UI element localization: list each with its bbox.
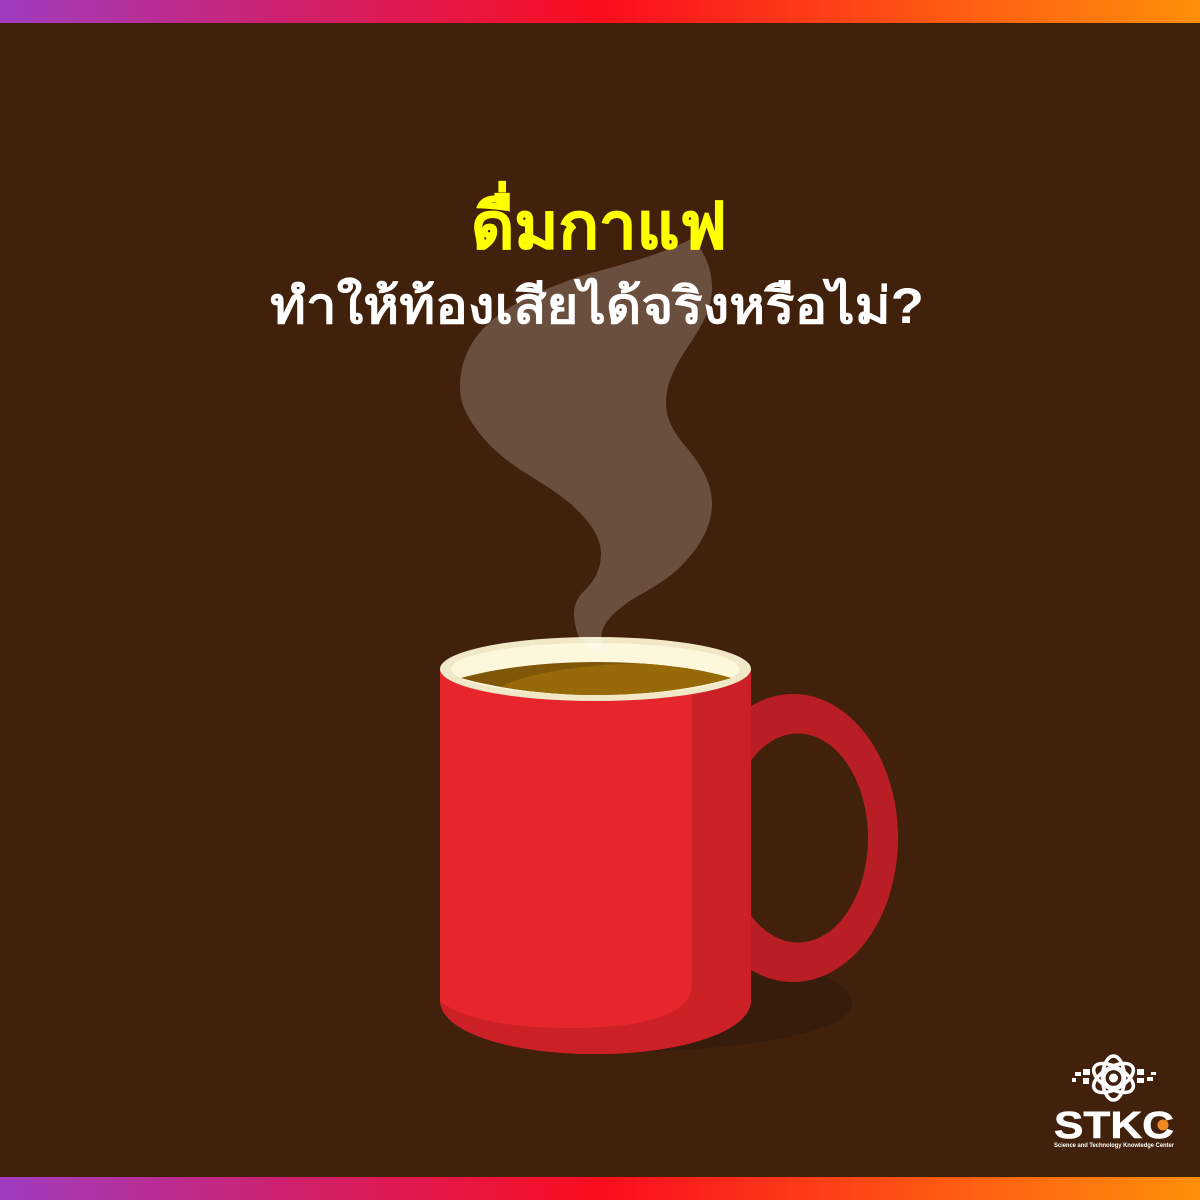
top gradient bar (0, 0, 1200, 23)
mug shading (430, 660, 760, 1060)
mug rim (440, 637, 751, 701)
steam (460, 238, 712, 640)
mug handle (688, 694, 898, 982)
bottom gradient bar (0, 1177, 1200, 1200)
coffee surface (461, 662, 731, 695)
logo atom icon (1089, 1056, 1138, 1100)
mug (440, 637, 751, 1054)
heading: yellow line: ดื่มกาแฟ (471, 181, 727, 262)
logo tagline: Science and Technology Knowledge Center (1054, 1143, 1175, 1149)
steam overlap on rim (580, 637, 606, 654)
rim inner (452, 643, 740, 695)
mug body (440, 670, 751, 1054)
logo wordmark: STKC (1054, 1105, 1174, 1147)
logo: STKC (1054, 1056, 1175, 1149)
logo pixels (1072, 1069, 1156, 1084)
logo orange dot (1158, 1120, 1168, 1130)
mug shadow (640, 960, 852, 1052)
title (270, 181, 924, 334)
heading: white line: ทำให้ท้องเสียได้จริงหรือไม่? (270, 277, 924, 334)
